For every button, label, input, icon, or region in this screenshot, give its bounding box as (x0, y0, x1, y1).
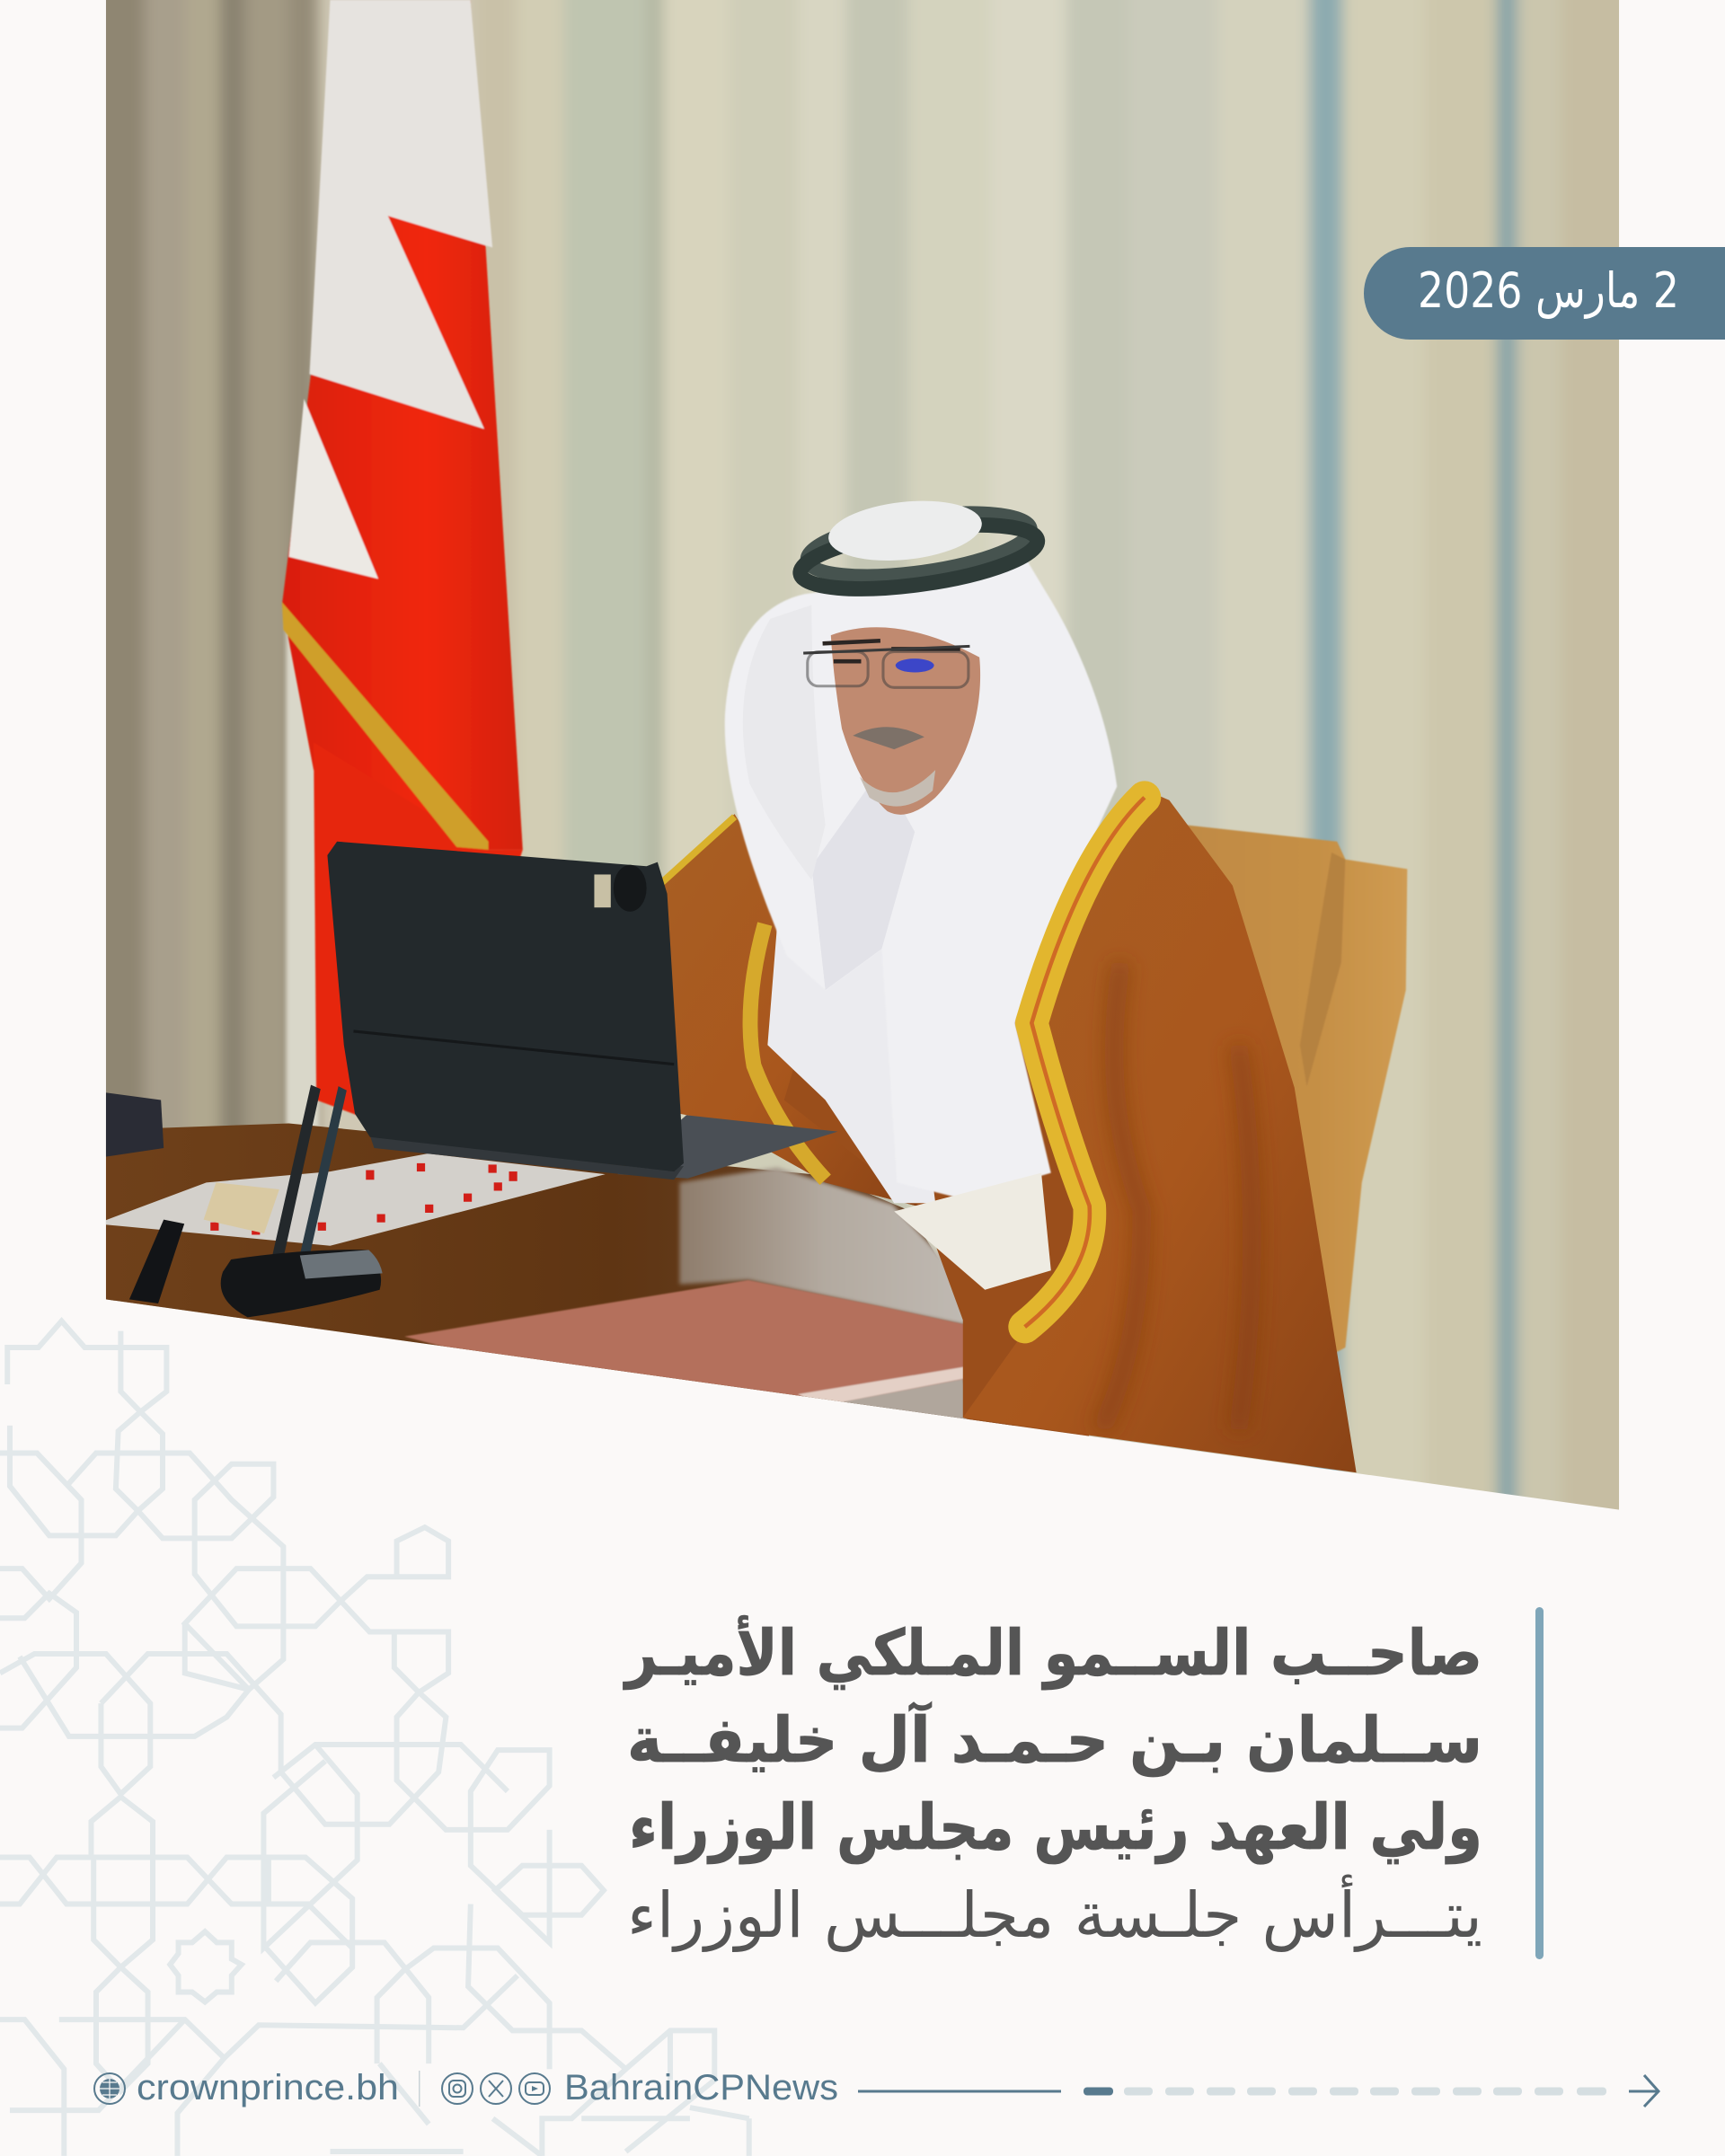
headline line 2: ســلمان بـن حـمـد آل خليفــة (627, 1701, 1482, 1777)
leather folder (404, 1279, 972, 1419)
man: torso (661, 494, 1357, 1472)
table reflection (679, 1167, 972, 1327)
flag gold fringe (282, 602, 489, 850)
pagination dashes (1084, 2088, 1606, 2095)
white desk mat with red markers (96, 1153, 606, 1246)
date badge: 2 مارس 2026 (1418, 262, 1679, 319)
date badge (1364, 247, 1725, 340)
social handle: BahrainCPNews (564, 2068, 838, 2107)
table (106, 1123, 1013, 1426)
man: glasses (803, 646, 969, 687)
name card (204, 1182, 279, 1233)
headline (623, 1615, 1482, 1952)
icon: globe (94, 2073, 125, 2104)
man: moustache and beard (853, 727, 924, 749)
icon: youtube (519, 2073, 550, 2104)
man: gold trim (1025, 798, 1145, 1327)
man: eyebrows and eyes (823, 641, 960, 661)
tablet label (594, 874, 611, 907)
flag white upper field (309, 0, 492, 429)
icon: instagram (442, 2073, 473, 2104)
headline line 3: ولي العهد رئيس مجلس الوزراء (629, 1790, 1482, 1864)
icon: x (481, 2073, 511, 2104)
flag white serration (289, 399, 378, 579)
tablet and keyboard (327, 842, 837, 1180)
progress line (858, 2090, 1061, 2093)
islamic geometric pattern (0, 1321, 749, 2156)
accent bar (1535, 1607, 1544, 1959)
photo: crown prince at desk (83, 0, 1650, 1540)
man: thobe (767, 929, 935, 1204)
man: cap (826, 494, 985, 568)
curtain sheer behind flag pole (286, 619, 319, 1141)
robe folds (1101, 962, 1252, 1430)
stacked books (106, 1092, 164, 1157)
pen stand (221, 1085, 383, 1317)
arrow (1629, 2075, 1659, 2107)
website: crownprince.bh (137, 2068, 399, 2107)
footer (94, 2068, 1659, 2107)
flag of Bahrain (282, 0, 523, 1141)
headline line 4: يتـــرأس جلـسة مجلـــس الوزراء (627, 1874, 1482, 1952)
chair (1186, 825, 1407, 1375)
man: head scarf (725, 557, 1117, 1199)
headline line 1: صاحــب الســمو المـلكي الأميـر (623, 1615, 1482, 1690)
man: cuff (894, 1173, 1051, 1290)
curtain background (83, 0, 1650, 1540)
man: agal (797, 501, 1041, 601)
pencil (129, 1220, 184, 1303)
man: face (831, 627, 980, 815)
